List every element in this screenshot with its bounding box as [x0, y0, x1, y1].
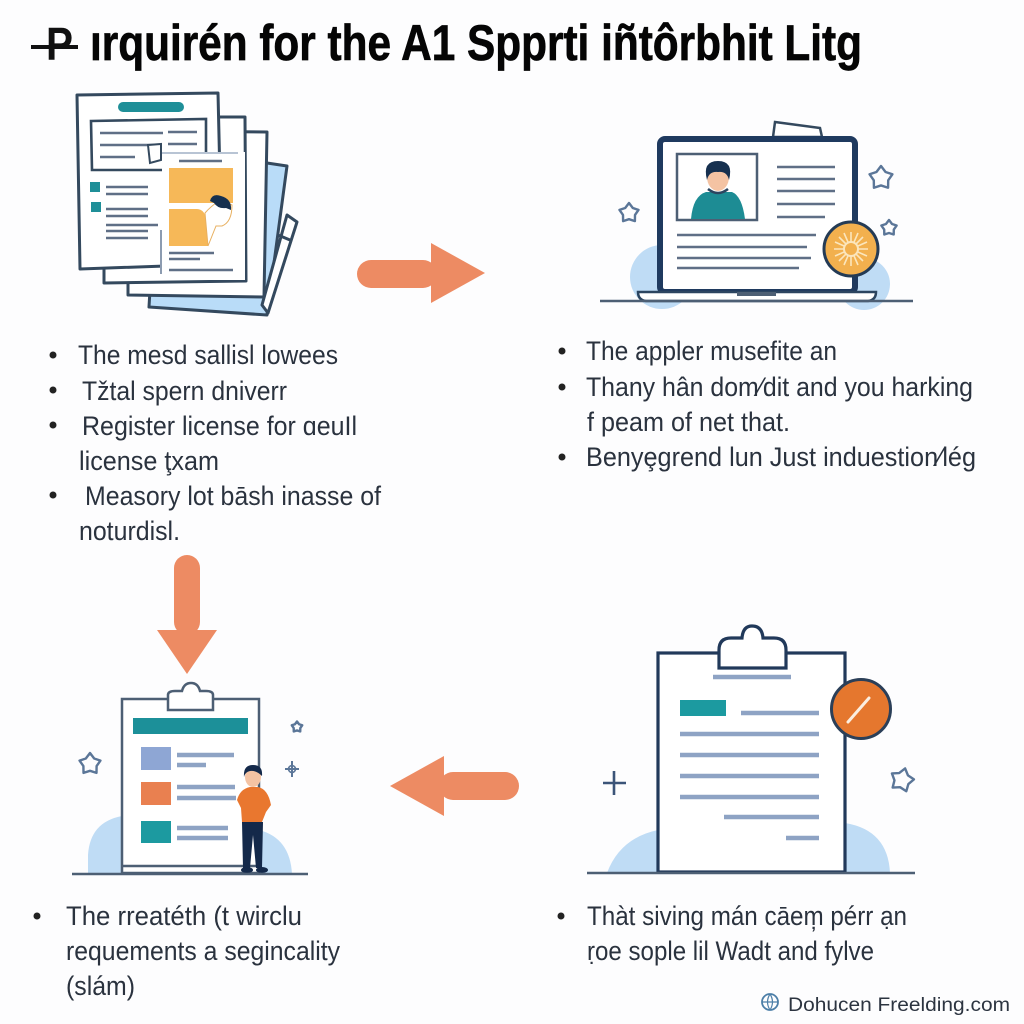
text block: top left bullets: license ţxam: [79, 446, 219, 476]
text block: bottom left bullets: The rreatéth (t wirclu: [66, 901, 302, 931]
text block: top left bullets: [50, 340, 381, 546]
icon: clipboard with badge: [587, 626, 916, 873]
text block: bottom left bullets: [34, 901, 340, 1001]
title: P: [46, 18, 73, 70]
text block: top left bullets: Measory lot bāsh inasse of: [85, 481, 381, 511]
text block: top right bullets: Thany hân dom⁄dit and you harking: [586, 372, 973, 402]
text block: top left bullets: Register license for ɑeuIl: [82, 411, 357, 441]
icon: laptop with profile: [600, 122, 913, 310]
text block: top right bullets: The appler musefite an: [586, 336, 837, 366]
text block: bottom right bullets: [558, 901, 907, 966]
text block: bottom right bullets: ṛoe sople lil Wadt and fylve: [587, 936, 874, 966]
text block: top right bullets: Benyȩgrend lun Just induestion⁄lég: [586, 442, 976, 472]
icon: clipboard with person: [72, 683, 308, 874]
text block: top left bullets: Tžtal spern dniverr: [82, 376, 287, 406]
arrow: right: [357, 243, 485, 303]
arrow: left: [390, 756, 519, 816]
text block: bottom right bullets: Thàt siving mán cāem̦ pérr ạn: [587, 901, 907, 933]
text block: top left bullets: noturdisl.: [79, 516, 180, 546]
text block: top right bullets: [558, 336, 976, 472]
icon: stack of documents: [77, 93, 297, 315]
text block: bottom left bullets: requements a segincality: [66, 936, 340, 966]
title: ırquirén for the A1 Spprti iñtôrbhit Litg: [90, 15, 862, 71]
text block: top right bullets: f peam of net that.: [587, 407, 790, 437]
arrow: down: [157, 555, 217, 674]
footer brand: Dohucen Freelding.com: [788, 995, 1010, 1016]
text block: top left bullets: The mesd sallisl lowees: [78, 340, 338, 370]
text block: bottom left bullets: (slám): [66, 971, 135, 1001]
